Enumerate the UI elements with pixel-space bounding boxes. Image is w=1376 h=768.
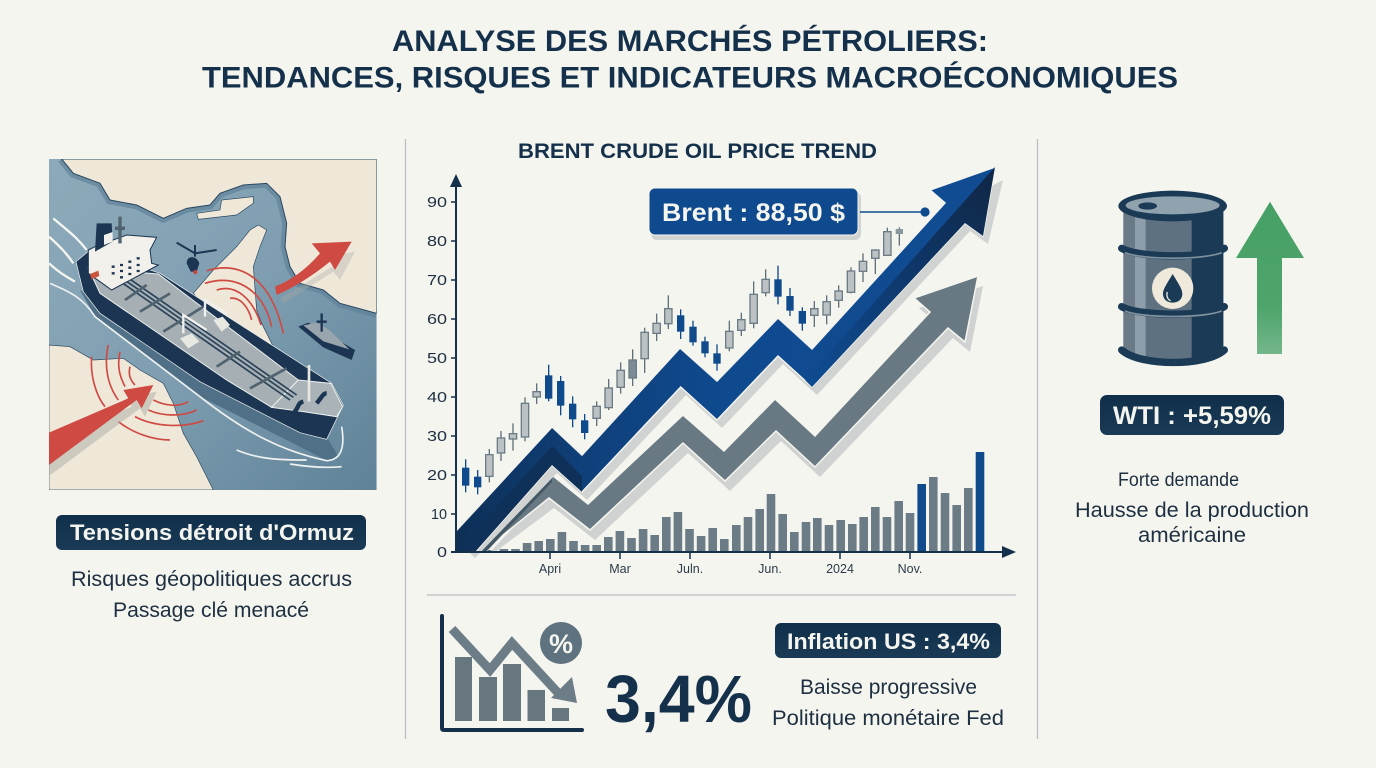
x axis labels: Juln. <box>677 562 703 576</box>
text: WTI notes <box>1075 470 1309 547</box>
pill: Tensions détroit d'Ormuz: Tensions détroit d'Ormuz <box>70 520 354 545</box>
x axis labels: Nov. <box>898 562 922 576</box>
x axis labels: Apri <box>539 562 561 576</box>
big figure: 3,4% <box>605 662 752 737</box>
y axis labels: 30 <box>427 428 447 445</box>
blue trend arrow <box>456 167 1003 558</box>
candlesticks: right part <box>726 227 903 351</box>
icon: green up arrow <box>1236 202 1304 354</box>
icon: declining bars <box>442 616 582 730</box>
signal arcs <box>91 268 283 440</box>
text: inflation notes: Baisse progressive <box>800 676 977 699</box>
pill: Inflation US <box>775 623 1001 658</box>
text: WTI notes: Hausse de la production <box>1075 499 1309 522</box>
pill: Inflation US: Inflation US : 3,4% <box>787 629 990 654</box>
panel: Brent chart <box>427 140 1016 576</box>
x axis labels: 2024 <box>826 562 854 576</box>
chart axes <box>450 174 1016 559</box>
y axis labels: 10 <box>431 506 447 523</box>
y axis labels: 90 <box>427 194 447 211</box>
ship hull <box>76 250 343 439</box>
pill: Tensions détroit d'Ormuz <box>56 515 366 550</box>
warship <box>298 323 355 360</box>
x axis labels: Jun. <box>758 562 782 576</box>
icon: oil barrel <box>1118 191 1227 363</box>
grey trend arrow <box>476 276 983 552</box>
panel: WTI <box>1075 191 1309 547</box>
volume bars <box>488 452 984 552</box>
x axis labels: Mar <box>609 562 631 576</box>
text: risks: Risques géopolitiques accrus <box>71 568 352 591</box>
callout: Brent price <box>649 188 930 240</box>
pill: WTI: WTI : +5,59% <box>1113 402 1271 430</box>
helicopter <box>177 243 217 257</box>
y axis labels: 0 <box>437 544 447 561</box>
pill: WTI <box>1100 395 1284 435</box>
text: risks <box>71 568 352 622</box>
text: risks: Passage clé menacé <box>113 599 309 622</box>
title: ANALYSE DES MARCHÉS PÉTROLIERS: <box>392 24 988 58</box>
y axis labels: 60 <box>427 311 447 328</box>
panel: Strait of Hormuz <box>49 159 377 622</box>
candlesticks <box>462 295 721 494</box>
y axis labels: 70 <box>427 272 447 289</box>
red arrows <box>49 392 157 476</box>
y axis labels: 40 <box>427 389 447 406</box>
title: TENDANCES, RISQUES ET INDICATEURS MACROÉCONOMIQUES <box>202 60 1178 94</box>
panel: US inflation <box>442 616 1004 737</box>
text: WTI notes: Forte demande <box>1118 470 1239 491</box>
icon: declining bars: % <box>549 629 573 659</box>
x axis labels <box>539 562 922 576</box>
y axis labels <box>427 194 447 561</box>
illustration: tanker in the strait <box>49 159 377 490</box>
chart heading: BRENT CRUDE OIL PRICE TREND <box>518 140 877 163</box>
text: inflation notes <box>772 676 1004 730</box>
text: inflation notes: Politique monétaire Fed <box>772 707 1004 730</box>
callout: Brent price: Brent : 88,50 $ <box>662 199 845 227</box>
y axis labels: 80 <box>427 233 447 250</box>
y axis labels: 20 <box>427 467 447 484</box>
superstructure <box>88 235 158 290</box>
title <box>202 24 1178 94</box>
y axis labels: 50 <box>427 350 447 367</box>
text: WTI notes: américaine <box>1138 524 1246 547</box>
